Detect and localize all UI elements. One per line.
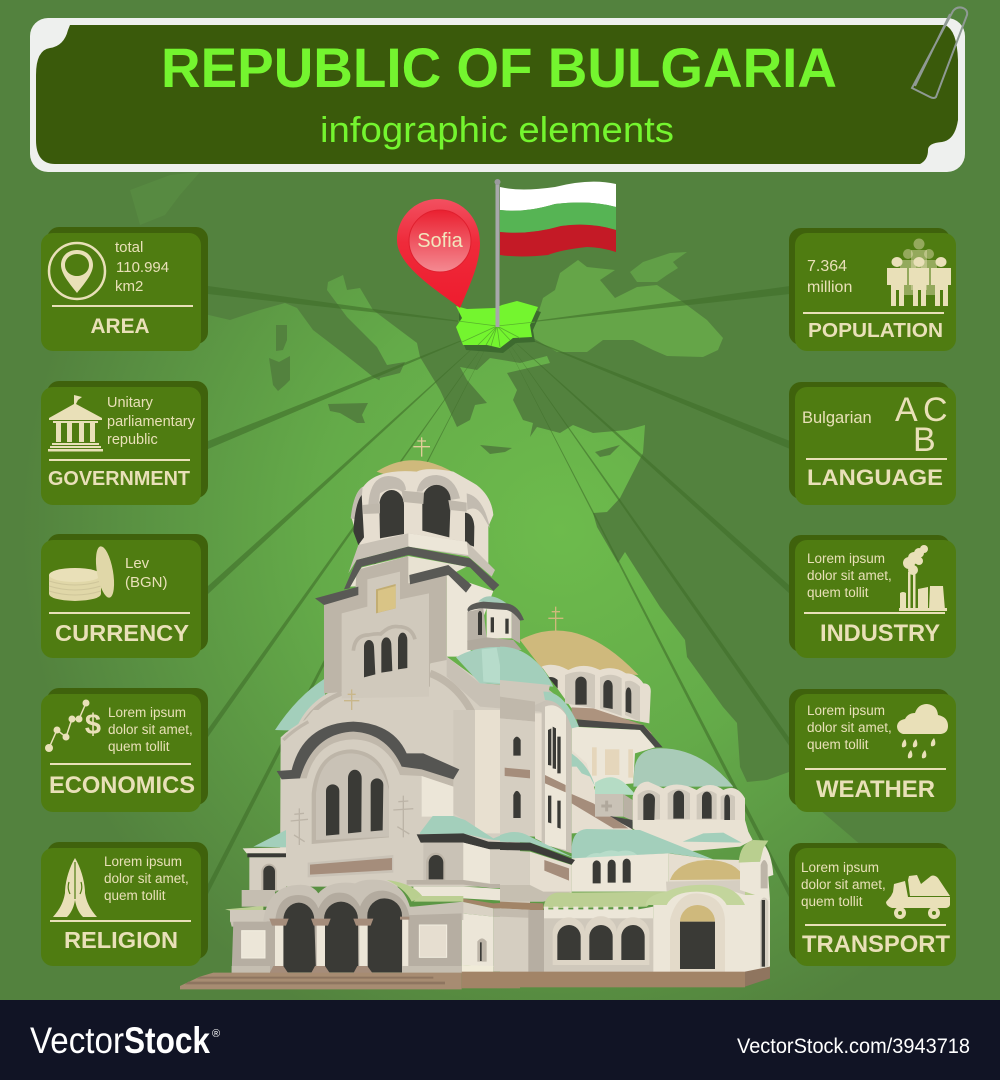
arch windows bbox=[326, 770, 383, 836]
dome bbox=[377, 460, 472, 487]
icon: people bbox=[887, 238, 951, 306]
bulgaria bbox=[456, 301, 538, 348]
small gold dome bbox=[666, 880, 747, 895]
icon: letters bbox=[895, 391, 948, 459]
shape shadow bbox=[459, 306, 541, 353]
icon: chart with dollar bbox=[45, 700, 101, 752]
banner board bbox=[36, 25, 958, 164]
cathedral: bell tower bbox=[275, 437, 553, 732]
panel: population bbox=[789, 228, 956, 351]
pin disc bbox=[409, 210, 471, 272]
inner arch bbox=[312, 749, 389, 844]
tower shoulder body bbox=[295, 657, 553, 732]
tower body bbox=[447, 575, 493, 657]
banner frame bbox=[30, 18, 965, 172]
cathedral: rear gold dome bbox=[520, 607, 663, 787]
population text: million bbox=[807, 279, 852, 296]
windows right col bbox=[513, 737, 520, 817]
lower walls bbox=[544, 907, 653, 920]
religion text: quem tollit bbox=[104, 888, 166, 903]
teal dome bbox=[456, 647, 553, 687]
portico plinth bbox=[232, 966, 270, 973]
left band bbox=[500, 832, 575, 858]
map: mediterranean sea bbox=[0, 275, 1000, 1000]
map: crete bbox=[480, 445, 512, 454]
three arches bbox=[553, 916, 649, 965]
drum band bbox=[348, 533, 495, 577]
green roofs bbox=[387, 880, 423, 902]
green stripe bbox=[500, 203, 616, 233]
green arcs bbox=[646, 885, 745, 905]
image reference: VectorStock.com/3943718 bbox=[737, 1035, 970, 1058]
icon: praying hands bbox=[53, 858, 97, 917]
religion text: dolor sit amet, bbox=[104, 871, 189, 886]
economics heading: ECONOMICS bbox=[49, 772, 195, 799]
government text: Unitary bbox=[107, 395, 154, 411]
subtitle: infographic elements bbox=[320, 109, 674, 150]
map: sicily bbox=[328, 403, 368, 423]
language heading: LANGUAGE bbox=[807, 465, 943, 490]
icon: letters: C bbox=[923, 391, 948, 429]
portico openings bbox=[283, 898, 402, 972]
weather text: Lorem ipsum bbox=[807, 703, 885, 718]
portico wall bbox=[230, 902, 463, 927]
industry text: quem tollit bbox=[807, 585, 869, 600]
religion text: Lorem ipsum bbox=[104, 854, 182, 869]
government heading: GOVERNMENT bbox=[48, 468, 190, 490]
arched bay bbox=[542, 700, 572, 853]
steps bbox=[180, 973, 462, 989]
panel: transport bbox=[789, 843, 956, 966]
icon: factory bbox=[899, 545, 947, 611]
economics text: Lorem ipsum bbox=[108, 705, 186, 720]
weather text: quem tollit bbox=[807, 737, 869, 752]
pin body bbox=[397, 199, 480, 308]
icon: letters: B bbox=[913, 421, 936, 459]
icon: chart with dollar: $ bbox=[85, 709, 101, 741]
icon: dump truck bbox=[886, 875, 950, 919]
economics text: quem tollit bbox=[108, 739, 170, 754]
population text: 7.364 bbox=[807, 258, 847, 275]
left wing bbox=[253, 830, 286, 847]
currency text: Lev bbox=[125, 555, 150, 572]
red stripe bbox=[500, 225, 616, 256]
icon: government building bbox=[48, 395, 103, 452]
white stripe bbox=[500, 182, 616, 211]
cathedral: main facade bbox=[180, 710, 520, 989]
map: corsica bbox=[276, 325, 287, 351]
population heading: POPULATION bbox=[808, 319, 943, 342]
gable small cross bbox=[344, 689, 359, 720]
inner rays bbox=[458, 321, 535, 347]
icon: rain cloud bbox=[897, 704, 948, 758]
panel: area bbox=[41, 227, 208, 351]
weather text: dolor sit amet, bbox=[807, 720, 892, 735]
panel: religion bbox=[41, 842, 208, 966]
vectorstock logo: ® bbox=[212, 1028, 220, 1040]
flag of bulgaria bbox=[494, 179, 616, 327]
area text: total bbox=[115, 239, 143, 256]
flag pole bbox=[496, 182, 500, 327]
industry heading: INDUSTRY bbox=[820, 620, 940, 647]
economics text: dolor sit amet, bbox=[108, 722, 193, 737]
cornices bbox=[315, 587, 358, 605]
currency heading: CURRENCY bbox=[55, 620, 189, 646]
square panels bbox=[242, 931, 265, 958]
panel: currency bbox=[41, 534, 208, 658]
door arch bbox=[670, 893, 725, 973]
footer bar bbox=[0, 1000, 1000, 1080]
gold window bbox=[376, 584, 396, 613]
pole finial bbox=[494, 179, 500, 185]
map: cyprus bbox=[595, 445, 620, 457]
bulgaria map shape bbox=[456, 301, 541, 353]
area heading: AREA bbox=[90, 315, 150, 338]
vectorstock logo: Vector bbox=[30, 1020, 124, 1061]
tower windows bbox=[353, 626, 415, 651]
map: sea of azov bbox=[630, 252, 687, 282]
teal roof bbox=[420, 816, 520, 842]
panel: weather bbox=[789, 689, 956, 812]
map: black sea bbox=[533, 260, 723, 357]
currency text: (BGN) bbox=[125, 574, 168, 591]
transport text: Lorem ipsum bbox=[801, 860, 879, 875]
industry text: Lorem ipsum bbox=[807, 551, 885, 566]
transport text: dolor sit amet, bbox=[801, 877, 886, 892]
map: sardinia bbox=[269, 356, 290, 391]
inscription plaque bbox=[308, 855, 393, 877]
area text: km2 bbox=[115, 278, 143, 295]
lower right walls bbox=[413, 887, 520, 902]
transport text: quem tollit bbox=[801, 894, 863, 909]
paperclip bbox=[912, 7, 967, 98]
industry text: dolor sit amet, bbox=[807, 568, 892, 583]
title: REPUBLIC OF BULGARIA bbox=[161, 36, 837, 99]
sofia pin bbox=[397, 199, 480, 308]
language text: Bulgarian bbox=[802, 409, 872, 427]
weather heading: WEATHER bbox=[816, 776, 935, 803]
icon: letters: A bbox=[895, 391, 918, 429]
vectorstock logo bbox=[30, 1020, 220, 1061]
diagonal wall bbox=[572, 750, 633, 833]
title banner bbox=[30, 7, 967, 172]
central walls bbox=[500, 718, 535, 837]
panel: language bbox=[789, 382, 956, 505]
portico arches bbox=[263, 880, 412, 922]
mid walls bbox=[668, 853, 740, 892]
panel: government bbox=[41, 381, 208, 505]
government text: republic bbox=[107, 432, 158, 448]
panel: economics bbox=[41, 688, 208, 812]
pin label: Sofia bbox=[417, 230, 464, 252]
icon: map pin bbox=[49, 243, 105, 299]
base bbox=[500, 972, 745, 987]
east dome bbox=[633, 748, 733, 787]
area text: 110.994 bbox=[116, 259, 169, 276]
transport heading: TRANSPORT bbox=[802, 931, 950, 958]
small chapel bbox=[595, 777, 636, 795]
religion heading: RELIGION bbox=[64, 927, 178, 953]
arch band bbox=[300, 732, 453, 787]
connector lines bbox=[208, 286, 790, 899]
map: north sea bbox=[130, 172, 200, 225]
turret bbox=[478, 596, 507, 603]
portico columns bbox=[269, 917, 409, 973]
right tower cap bbox=[740, 843, 773, 900]
left teal dome bbox=[275, 678, 325, 732]
green roof bbox=[543, 892, 667, 908]
panel: industry bbox=[789, 535, 956, 658]
vectorstock logo: Stock bbox=[124, 1020, 210, 1061]
wall crosses bbox=[291, 796, 413, 845]
government text: parliamentary bbox=[107, 414, 196, 430]
cathedral: right wing bbox=[500, 647, 773, 987]
cathedral bbox=[180, 437, 773, 989]
teal dome continuation bbox=[500, 647, 552, 685]
world map bbox=[0, 172, 1000, 1000]
icon: coins bbox=[49, 545, 117, 601]
mid teal roof bbox=[572, 829, 713, 859]
tower cross bbox=[413, 437, 430, 457]
drum bbox=[352, 469, 493, 563]
